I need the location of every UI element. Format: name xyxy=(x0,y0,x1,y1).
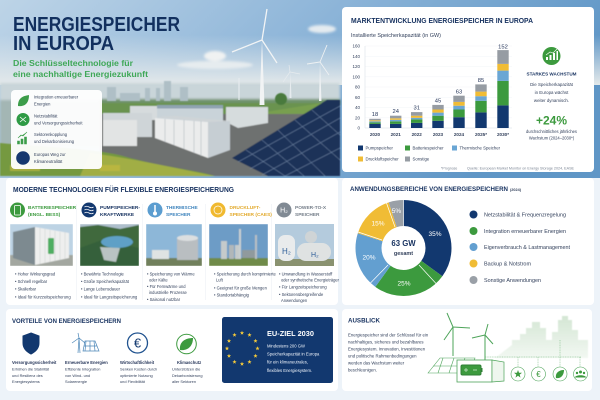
panel: applications xyxy=(342,178,594,305)
column: pumped hydro xyxy=(80,202,140,300)
title: IN EUROPA xyxy=(13,33,114,55)
chart legend: Sonstige xyxy=(412,156,430,162)
column: compressed air: • Standortabhängig xyxy=(214,292,250,298)
benefit: economy: Wirtschaftlichkeit xyxy=(120,360,155,365)
panel: market development xyxy=(342,7,594,172)
benefit: economy: optimierte Nutzung xyxy=(120,373,153,378)
icon: euro circle xyxy=(532,367,546,381)
column: compressed air: • Speicherung durch komprimierte xyxy=(214,272,276,276)
panel: benefits xyxy=(6,309,338,391)
column: battery storage: • Skalierbar xyxy=(15,286,37,292)
icon: euro xyxy=(128,333,148,353)
year labels: 2020 xyxy=(370,132,381,137)
column: compressed air xyxy=(209,202,276,298)
bar totals: 18 xyxy=(372,112,378,118)
outlook text: nachhaltiges, sicheres und bezahlbares xyxy=(348,340,423,344)
bar chart: 100 xyxy=(352,74,360,79)
column: power to x: • Für Langzeitspeicherung xyxy=(279,284,327,290)
column: power to x: H₂ xyxy=(282,247,291,256)
benefit: security: und Resilienz des xyxy=(12,373,43,378)
donut legend: Sonstige Anwendungen xyxy=(484,278,541,284)
bar chart: 140 xyxy=(352,54,360,59)
year labels: 2024 xyxy=(454,132,465,137)
bar totals: 85 xyxy=(478,78,484,84)
key point texts: Europas Weg zur xyxy=(34,152,66,157)
column: power to x: oder synthetische Energieträger xyxy=(281,278,340,282)
column: pumped hydro: • Ideal für Langzeitspeicherung xyxy=(81,294,138,300)
chart legend: Thermische Speicher xyxy=(460,146,501,150)
callout: strong growth: Die Speicherkapazität xyxy=(530,82,574,87)
column: battery storage: • Hoher Wirkungsgrad xyxy=(15,272,56,276)
benefit: economy: und Flexibilität xyxy=(120,379,146,384)
icon: grid stability xyxy=(16,113,30,126)
outlook text: werden das Wachstum weiter xyxy=(348,360,405,366)
donut legend: Backup & Notstrom xyxy=(484,262,531,268)
footnote: Quelle: European Market Monitor on Energy Storage 2024, EASE xyxy=(467,166,575,170)
key point texts: Klimaneutralität xyxy=(34,159,63,164)
benefit: climate: aller Sektoren xyxy=(172,379,196,384)
column: pumped hydro: PUMPSPEICHER- xyxy=(100,205,140,211)
callout: strong growth: in Europa wächst xyxy=(535,90,569,95)
solar array xyxy=(232,100,340,176)
column: power to x: Anwendungen xyxy=(281,298,308,303)
panel: technologies xyxy=(6,178,340,305)
donut legend: Eigenverbrauch & Lastmanagement xyxy=(484,245,571,251)
benefit: economy: Senken Kosten durch xyxy=(120,366,157,372)
year labels: 2030* xyxy=(497,132,509,137)
key point texts: und Versorgungssicherheit xyxy=(34,120,83,126)
illustration: city, turbines, battery xyxy=(428,313,588,382)
containers xyxy=(130,106,157,120)
column: battery storage: • Ideal für Kurzzeitspeicherung xyxy=(15,294,71,300)
year labels: 2025* xyxy=(475,132,487,137)
key point texts: Sektorenkopplung xyxy=(34,132,68,137)
bar chart xyxy=(352,44,512,137)
benefit: security xyxy=(12,360,57,384)
benefit: security: Energiesystems xyxy=(12,379,40,384)
bar chart: 160 xyxy=(352,44,360,48)
column: compressed air: DRUCKLUFT- xyxy=(230,205,261,211)
column: thermal storage: oder Kälte xyxy=(149,278,168,282)
column: compressed air: Luft xyxy=(216,278,224,282)
column: power to x: • Umwandlung in Wasserstoff xyxy=(279,272,333,276)
chart legend: Batteriespeicher xyxy=(412,146,444,150)
benefit: renewables: Solarenergie xyxy=(65,379,87,384)
icon: growth chart xyxy=(18,132,27,144)
hero background: landscape with storage, wind and solar xyxy=(0,0,600,178)
donut chart: 25% xyxy=(397,280,411,288)
callout: strong growth: +24% xyxy=(536,114,567,128)
callout: strong growth xyxy=(526,72,577,140)
column: power to x: SPEICHER xyxy=(295,212,320,218)
column: battery storage: BATTERIESPEICHER xyxy=(28,205,77,211)
icon: leaf xyxy=(18,95,29,106)
bar chart: 120 xyxy=(352,64,360,69)
bar totals: 63 xyxy=(456,90,462,96)
icon: climate leaf xyxy=(177,334,196,354)
wind turbines xyxy=(232,9,329,105)
column: pumped hydro: • Bewährte Technologie xyxy=(81,272,125,276)
key point texts: Energien xyxy=(34,102,51,106)
panel: outlook xyxy=(342,309,592,391)
subtitle xyxy=(13,59,148,79)
heading: benefits: VORTEILE VON ENERGIESPEICHERN xyxy=(12,318,121,325)
benefit: climate xyxy=(172,360,202,384)
column: battery storage: • Schnell regelbar xyxy=(15,279,48,284)
column: thermal storage xyxy=(146,202,202,302)
benefit: renewables xyxy=(65,360,108,384)
bar totals: 152 xyxy=(498,44,508,50)
column: pumped hydro: • Große Speicherkapazität xyxy=(81,279,130,284)
icon: growth badge xyxy=(542,47,560,65)
heading: technologies: MODERNE TECHNOLOGIEN FÜR FLEXIBLE ENERGIESPEICHERUNG xyxy=(13,185,234,194)
icon: EU stars xyxy=(225,331,260,366)
year labels xyxy=(370,132,509,137)
outlook text: beschleunigen. xyxy=(348,368,377,372)
donut legend: Integration erneuerbarer Energien xyxy=(484,229,566,235)
bar chart: 40 xyxy=(355,105,360,110)
outlook text: Energiesystem. Innovation, Investitionen xyxy=(348,346,426,352)
column: power to x: H₂ xyxy=(311,252,319,259)
bar chart: 0 xyxy=(357,126,360,130)
donut legend xyxy=(470,210,571,284)
benefit: security: Versorgungssicherheit xyxy=(12,360,57,365)
subtitle: Die Schlüsseltechnologie für xyxy=(13,59,133,68)
callout: strong growth: Wachstum (2024–2030*) xyxy=(529,136,575,140)
subtitle: eine nachhaltige Energiezukunft xyxy=(13,70,148,79)
bar totals xyxy=(372,44,508,118)
benefit: renewables: von Wind- und xyxy=(65,373,90,378)
column: battery storage: (ENGL. BESS) xyxy=(28,212,61,218)
chart legend xyxy=(358,146,501,162)
benefit: climate: Dekarbonisierung xyxy=(172,373,202,378)
icon: wind and solar xyxy=(72,333,99,353)
column: pumped hydro: KRAFTWERKE xyxy=(100,212,135,218)
callout: EU target 2030: EU-ZIEL 2030 xyxy=(267,329,314,338)
donut chart: 5% xyxy=(392,208,401,215)
callout: EU target 2030 xyxy=(222,317,333,383)
chart legend: Pumpspeicher xyxy=(366,146,394,150)
year labels: 2023 xyxy=(433,132,444,137)
column: battery storage xyxy=(10,202,77,300)
heading: outlook: AUSBLICK xyxy=(348,318,380,324)
callout: strong growth: STARKES WACHSTUM xyxy=(526,72,576,78)
column: pumped hydro: • Lange Lebensdauer xyxy=(81,286,121,292)
title xyxy=(13,14,180,55)
column: power to x: H₂ xyxy=(280,208,288,214)
outlook text: Energiespeicher sind der Schlüssel für ein xyxy=(348,332,429,338)
bar chart: 60 xyxy=(355,95,360,100)
chart subtitle: Installierte Speicherkapazität (in GW) xyxy=(351,33,441,39)
bar totals: 31 xyxy=(413,106,420,112)
callout: EU target 2030: für ein klimaneutrales, xyxy=(267,360,308,364)
column: thermal storage: industrielle Prozesse xyxy=(149,290,187,295)
benefit: renewables: Effiziente Integration xyxy=(65,366,100,372)
bar totals: 45 xyxy=(435,98,441,104)
icon: shield xyxy=(23,333,39,354)
bars 2030 xyxy=(497,50,509,128)
benefit: climate: Unterstützen die xyxy=(172,366,200,372)
column: compressed air: • Geeignet für große Mengen xyxy=(214,286,268,290)
column: compressed air: SPEICHER (CAES) xyxy=(230,212,272,218)
year labels: 2021 xyxy=(391,132,401,137)
outlook text xyxy=(348,332,429,372)
key point texts xyxy=(34,94,83,164)
title: ENERGIESPEICHER xyxy=(13,14,180,36)
key point texts: Netzstabilität xyxy=(34,114,58,118)
bar chart: 20 xyxy=(355,115,360,120)
column: thermal storage: SPEICHER xyxy=(166,212,191,218)
column: power to x: POWER-TO-X xyxy=(295,205,327,211)
donut legend: Netzstabilität & Frequenzregelung xyxy=(484,212,566,218)
footnote: *Prognose xyxy=(441,166,457,170)
column: thermal storage: THERMISCHE xyxy=(166,205,199,211)
benefit: economy xyxy=(120,360,157,384)
column: power to x: • Sektorenübergreifende xyxy=(279,292,324,297)
icon: people circle xyxy=(574,367,588,381)
callout: EU target 2030: flexibles Energiesystem. xyxy=(267,368,312,373)
callout: strong growth: weiter dynamisch. xyxy=(534,98,569,103)
bars 2023 xyxy=(432,105,444,128)
donut chart xyxy=(358,200,442,288)
bars 2021 xyxy=(390,116,401,128)
donut chart: 15% xyxy=(371,220,385,228)
callout: strong growth: durchschnittliches jährliches xyxy=(526,129,577,134)
key point texts: Integration erneuerbarer xyxy=(34,94,79,100)
donut chart: 20% xyxy=(362,254,376,262)
heading: applications: ANWENDUNGSBEREICHE VON ENERGIESPEICHERN xyxy=(350,186,508,193)
benefit: climate: Klimaschutz xyxy=(177,360,201,365)
donut chart: 63 GW xyxy=(391,239,416,248)
icon: leaf circle xyxy=(553,367,567,381)
callout: EU target 2030: Mindestens 200 GW xyxy=(267,344,305,348)
bars 2022 xyxy=(411,112,422,128)
column: thermal storage: • Speicherung von Wärme xyxy=(147,272,195,276)
bars 2020 xyxy=(369,119,381,128)
column: thermal storage: • Für Fernwärme und xyxy=(147,284,186,289)
icon: star circle xyxy=(511,367,525,381)
callout: EU target 2030: Speicherkapazität in Europa xyxy=(267,352,320,356)
donut chart: 35% xyxy=(428,231,442,238)
benefit: renewables: Erneuerbare Energien xyxy=(65,360,108,365)
bars 2024 xyxy=(453,96,465,128)
icon: EU circle xyxy=(16,151,30,165)
icon: euro: € xyxy=(134,336,142,350)
panel: hero key points xyxy=(11,90,102,169)
column: thermal storage: • Saisonal nutzbar xyxy=(147,297,181,302)
heading: market: MARKTENTWICKLUNG ENERGIESPEICHER IN EUROPA xyxy=(351,16,534,25)
heading: applications: (2024) xyxy=(510,188,522,192)
key point texts: und Dekarbonisierung xyxy=(34,139,75,144)
column: power to x xyxy=(275,202,340,303)
icon: euro circle: € xyxy=(536,370,541,379)
benefit: security: Erhöhen die Stabilität xyxy=(12,366,50,372)
donut chart: gesamt xyxy=(394,251,413,257)
year labels: 2022 xyxy=(412,132,422,137)
outlook text: und politische Rahmenbedingungen xyxy=(348,354,417,358)
chart legend: Druckluftspeicher xyxy=(366,156,399,162)
bar chart: 80 xyxy=(355,84,360,90)
bar totals: 24 xyxy=(392,109,400,115)
bars 2025 xyxy=(475,84,487,128)
